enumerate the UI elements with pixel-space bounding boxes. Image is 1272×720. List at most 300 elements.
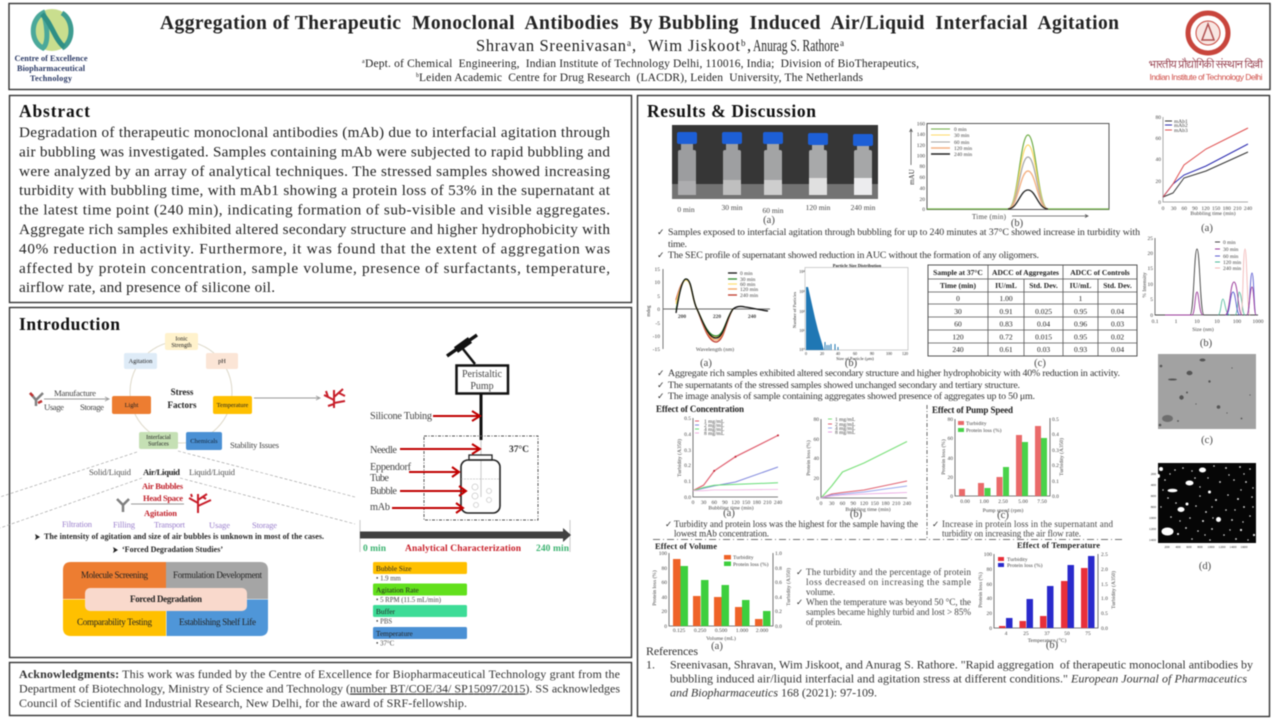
chart: SEC profile: 160 [917, 122, 925, 128]
logo: IIT Delhi: Indian Institute of Technology Delhi [1150, 72, 1263, 82]
vial time labels: 0 min [677, 205, 695, 214]
chart: pump speed bars: 0.4 [1052, 432, 1059, 438]
experimental parameters list: • 1.9 mm [376, 576, 402, 582]
chart: turbidity vs bubbling time: 210 [763, 500, 772, 506]
text: pump speed finding: Increase in protein loss in the supernatant and [942, 519, 1114, 529]
micrograph: aggregates [1158, 354, 1256, 446]
chart: mAb1-3 turbidity over time: mAb3 [1174, 128, 1188, 134]
diagram: stress factors: Light [125, 402, 139, 409]
text: aggregate findings: The image analysis of sample containing aggregates showed presence of aggregates up to 50 μm. [668, 391, 1035, 402]
chart: protein loss vs bubbling time: 90 [850, 501, 856, 507]
process steps: Transport [154, 520, 186, 530]
chart: volume bars: 1.0 [775, 551, 782, 557]
chart: protein loss vs bubbling time: 20 [814, 476, 819, 482]
chart: volume bars: (a) [711, 641, 723, 652]
chart: temperature bars: Turbidity [1007, 557, 1028, 563]
chart: SEC profile: 240 min [954, 152, 972, 158]
table: ADCC: 0.04 [1037, 320, 1050, 328]
chart: temperature bars: (b) [1046, 640, 1059, 651]
arrow: temperature to aggregate [254, 396, 320, 400]
references: References [646, 644, 698, 658]
chart: pump speed bars: 20 [948, 475, 953, 481]
chart: temperature bars: Turbidity (A350) [1110, 571, 1117, 609]
chart: pump speed bars: 1.00 [979, 499, 989, 505]
chart: mAb1-3 turbidity over time: (a) [1201, 223, 1213, 234]
chart: dynamic light scattering: 0 min [1223, 240, 1236, 246]
chart: pump speed bars: 40 [948, 456, 953, 462]
abstract text [19, 124, 611, 296]
chart: circular dichroism: 30 min [740, 277, 756, 283]
table: ADCC: 1.00 [999, 294, 1013, 303]
forced degradation grid: Establishing Shelf Life [179, 617, 256, 627]
table: ADCC: IU/mL [995, 281, 1017, 290]
chart: mAb1-3 turbidity over time: 0 [1162, 206, 1165, 212]
title: Aggregation of Therapeutic Monoclonal Antibodies By Bubbling Induced Air/Liquid Interfacial Agitation [160, 13, 1119, 34]
chart: SEC profile: 80 [920, 164, 925, 170]
chart: dynamic light scattering: 10 [1194, 319, 1200, 325]
authors: a [840, 38, 844, 48]
authors: , [747, 36, 751, 55]
chart: protein loss vs bubbling time: 4 mg/mL [835, 426, 856, 432]
chart: circular dichroism: 0 [657, 307, 660, 313]
arrow: manufacture to light [44, 388, 109, 412]
agitation schematic [117, 481, 211, 518]
chart: volume bars: 0.4 [775, 595, 782, 601]
chart: protein loss vs bubbling time: 0 [820, 501, 823, 507]
chart: particle size distribution: 80 [870, 351, 874, 356]
diagram: stress factors: pH [218, 358, 226, 365]
chart: volume bars: Volume (mL) [706, 635, 736, 642]
text: concentration finding [665, 519, 918, 538]
panel: acknowledgments: Department of Biotechnology, Ministry of Science and Technology (number BT/COE/34/ SP15097/2015). SS acknowledges [19, 682, 620, 696]
chart: circular dichroism: 60 min [740, 282, 756, 288]
text: SEC findings: ✓ [657, 251, 665, 261]
forced degradation grid [63, 562, 268, 636]
vial time labels: 120 min [806, 203, 831, 212]
text: SEC findings: ✓ [657, 228, 665, 238]
intro bullets: ‘Forced Degradation Studies’ [122, 545, 223, 554]
table: ADCC: 120 [952, 332, 964, 342]
chart: protein loss vs bubbling time: 1 mg/mL [835, 417, 856, 423]
chart: mAb1-3 turbidity over time: 210 [1233, 206, 1242, 212]
chart: protein loss vs bubbling time: 210 [892, 501, 901, 507]
panel: acknowledgments [10, 662, 632, 716]
abstract text: affected by protein concentration, sample volume, presence of surfactants, temperature, [19, 260, 610, 277]
heading: effect of pump speed: Effect of Pump Speed [932, 405, 1013, 415]
process steps: Filtration [62, 519, 93, 529]
chart: turbidity vs bubbling time: 0.0 [684, 495, 691, 501]
chart: turbidity vs bubbling time: 0.3 [684, 448, 691, 454]
chart: turbidity vs bubbling time: 0.1 [684, 479, 691, 485]
chart: volume bars: Turbidity (A350) [785, 568, 792, 606]
table: ADCC: ADCC of Controls [1070, 268, 1130, 277]
diagram: stress factors: Factors [168, 400, 197, 410]
chart: dynamic light scattering: 10 [1214, 319, 1220, 325]
chart: volume bars: 0.250 [694, 628, 706, 634]
chart: dynamic light scattering: 240 min [1223, 266, 1241, 272]
chart: mAb1-3 turbidity over time: Bubbling time (min) [1190, 210, 1236, 217]
chart: mAb1-3 turbidity over time: 30 [1171, 206, 1177, 212]
intro bullets [35, 532, 324, 554]
binary image: aggregates: 400 [1175, 545, 1181, 549]
table: ADCC: Time (min) [940, 281, 976, 290]
photo: vials over time [672, 125, 878, 199]
chart: pump speed bars: 0.1 [1052, 479, 1059, 485]
experimental parameters list [373, 562, 467, 648]
text: aggregate findings: ✓ [657, 381, 665, 391]
diagram: peristaltic pump setup: Eppendorf [370, 462, 412, 473]
arrow: timeline [360, 520, 571, 554]
diagram: stress factors: Ionic [175, 336, 188, 342]
chart: volume bars: 40 [662, 595, 667, 601]
experimental parameters list: Bubble Size [376, 564, 411, 573]
table: ADCC: ADCC of Aggregates [992, 268, 1059, 277]
binary image: aggregates: 1000 [1208, 545, 1215, 549]
chart: SEC profile: 60 min [954, 140, 970, 146]
chart: protein loss vs bubbling time: 8 mg/mL [835, 430, 856, 436]
chart: pump speed bars: 2.50 [998, 499, 1008, 505]
table: ADCC: 0.025 [1035, 307, 1052, 316]
chart: mAb1-3 turbidity over time [1156, 115, 1252, 234]
chart: pump speed bars: 0.00 [960, 499, 970, 505]
chart: circular dichroism: 200 [678, 314, 686, 320]
affiliations: b [416, 73, 419, 79]
table: ADCC: 0.015 [1035, 332, 1052, 342]
vial time labels: 60 min [762, 206, 784, 215]
abstract text: the latest time point (240 min), indicating formation of sub-visible and visible aggregates. [19, 202, 610, 219]
diagram: peristaltic pump setup: Needle [370, 445, 397, 456]
chart: dynamic light scattering: 5 [1150, 297, 1153, 303]
panel: acknowledgments: Acknowledgments: This work was funded by the Centre of Excellence for Biopharmaceutical Technology grant from the [19, 667, 620, 681]
binary image: aggregates: 1600 [1240, 545, 1248, 549]
binary image: aggregates: 1400 [1230, 545, 1237, 549]
chart: pump speed bars: 5.00 [1018, 499, 1028, 505]
chart: circular dichroism: -5 [655, 321, 660, 327]
chart: protein loss vs bubbling time: 80 [814, 417, 819, 423]
chart: turbidity vs bubbling time: 90 [722, 500, 728, 506]
forced degradation grid: Formulation Development [173, 570, 262, 580]
chart: pump speed bars: (c) [997, 510, 1009, 521]
chart: SEC profile: 0 min [954, 127, 967, 133]
text: volume and temperature findings: loss decreased on increasing the sample [806, 577, 971, 587]
chart: particle size distribution: 10⁴ [799, 269, 805, 274]
chart: dynamic light scattering: 10 [1148, 282, 1153, 288]
heading: effect of concentration: Effect of Concentration [656, 404, 744, 414]
process steps: Usage [209, 520, 230, 530]
chart: temperature bars: 40 [986, 596, 992, 602]
chart: temperature bars: 1.5 [1101, 582, 1108, 588]
binary image: aggregates: 800 [1151, 505, 1156, 509]
affiliations: Leiden Academic Centre for Drug Research (LACDR), Leiden University, The Netherlands [419, 72, 864, 84]
chart: SEC profile: 140 [917, 132, 925, 138]
chart: SEC profile: 120 [917, 143, 925, 149]
text: volume and temperature findings [796, 567, 971, 627]
experimental parameters list: • 37°C [376, 640, 395, 648]
binary image: aggregates: 200 [1151, 472, 1156, 476]
panel: abstract [10, 96, 632, 302]
chart: mAb1-3 turbidity over time: 180 [1223, 206, 1231, 212]
chart: SEC profile: 100 [917, 154, 925, 160]
logo: IIT Delhi: भारतीय प्रौद्योगिकी संस्थान दिल्ली [1149, 57, 1264, 71]
chart: temperature bars: Protein loss (%) [1007, 562, 1043, 569]
affiliations: a [362, 59, 365, 65]
experimental parameters list: • 5 RPM (11.5 mL/min) [376, 597, 441, 604]
table: ADCC: IU/mL [1070, 281, 1091, 290]
chart: particle size distribution: Number of Particles [792, 292, 797, 328]
diagram: stress factors: Agitation [129, 358, 153, 365]
references: bubbling induced air/liquid interfacial and agitation stress at different conditions." European Journal of Pharmaceutics [670, 672, 1247, 686]
arrow: timeline: 240 min [536, 544, 570, 554]
chart: temperature bars [977, 552, 1117, 651]
chart: turbidity vs bubbling time: Bubbling time (min) [708, 504, 754, 512]
chart: SEC profile: 0 [922, 207, 925, 213]
diagram: peristaltic pump setup: mAb [370, 502, 390, 513]
table: ADCC: 0.03 [1037, 345, 1050, 354]
diagram: peristaltic pump setup: Tube [370, 473, 389, 484]
abstract text: were analyzed by an array of analytical techniques. The stressed samples showed increasing [19, 163, 610, 180]
authors: Wim Jiskoot [648, 36, 740, 55]
chart: volume bars: 100 [659, 551, 667, 557]
chart: circular dichroism: 0 min [740, 271, 753, 277]
chart: pump speed bars: 0.3 [1052, 448, 1059, 454]
table: ADCC: 0.04 [1111, 307, 1124, 316]
chart: circular dichroism: Wavelength (nm) [696, 346, 734, 353]
text: concentration finding: Turbidity and protein loss was the highest for the sample having the [674, 519, 918, 529]
text: concentration finding: lowest mAb concentration. [674, 528, 769, 538]
chart: dynamic light scattering: 120 min [1223, 260, 1241, 266]
agitation schematic: Agitation [144, 508, 177, 518]
chart: turbidity vs bubbling time: 0.4 [684, 432, 691, 438]
diagram: stress factors: Interfacial [146, 434, 171, 441]
chart: circular dichroism [647, 267, 770, 369]
affiliations: Dept. of Chemical Engineering, Indian Institute of Technology Delhi, 110016, India; Division of BioTherapeutics, [365, 58, 919, 70]
references [646, 644, 1253, 700]
text: volume and temperature findings: When the temperature was beyond 50 °C, the [806, 597, 971, 607]
chart: dynamic light scattering: 30 min [1223, 247, 1239, 253]
logo: IIT Delhi [1149, 13, 1264, 82]
vial time labels: 30 min [721, 203, 743, 212]
agitation schematic: Air Bubbles [142, 481, 184, 491]
chart: pump speed bars: Turbidity (A350) [1058, 438, 1065, 476]
panel: acknowledgments: Council of Scientific and Industrial Research, New Delhi, for the award of SRF-fellowship. [19, 696, 467, 710]
chart: dynamic light scattering: 0.1 [1152, 319, 1159, 325]
chart: temperature bars: 0 [989, 626, 992, 632]
chart: volume bars: 0.6 [775, 580, 782, 586]
chart: circular dichroism: 240 min [740, 293, 758, 299]
chart: dynamic light scattering: Size (nm) [1192, 326, 1214, 333]
chart: particle size distribution: 10⁰ [799, 347, 805, 352]
chart: turbidity vs bubbling time: 2 mg/mL [704, 423, 725, 429]
diagram: peristaltic pump setup: Peristaltic [462, 369, 503, 380]
affiliations [362, 58, 919, 84]
text: volume and temperature findings: of protein. [806, 617, 842, 627]
chart: protein loss vs bubbling time: 60 [814, 437, 819, 443]
table: ADCC: 0.03 [1111, 320, 1124, 328]
abstract text: Aggregate rich samples exhibited altered secondary structure and higher hydrophobicity with [19, 221, 610, 238]
chart: dynamic light scattering: 100 [1233, 319, 1241, 325]
chart: temperature bars: 80 [986, 567, 992, 573]
chart: temperature bars: 60 [986, 582, 992, 588]
panel: header [9, 4, 1270, 90]
chart: temperature bars: 1.0 [1101, 596, 1108, 602]
forced degradation grid: Comparability Testing [77, 617, 152, 627]
chart: temperature bars: 20 [986, 611, 992, 617]
chart: SEC profile: Time (min) [972, 213, 1007, 221]
interface labels: Liquid/Liquid [189, 467, 236, 477]
chart: mAb1-3 turbidity over time: 60 [1156, 136, 1161, 142]
binary image: aggregates: 600 [1186, 545, 1192, 549]
chart: protein loss vs bubbling time: 0 [816, 496, 819, 502]
chart: volume bars: Turbidity [733, 555, 754, 561]
chart: pump speed bars: 0.0 [1052, 494, 1059, 500]
authors: Shravan Sreenivasan [476, 36, 626, 55]
chart: circular dichroism: (a) [700, 358, 712, 369]
chart: particle size distribution: 20 [820, 351, 824, 356]
chart: protein loss vs bubbling time: Bubbling time (min) [845, 506, 891, 513]
chart: dynamic light scattering [1142, 236, 1264, 349]
chart: temperature bars: 2.5 [1101, 552, 1108, 558]
chart: temperature bars: 25 [1023, 631, 1029, 637]
experimental parameters list: Temperature [376, 629, 413, 638]
vial time labels [677, 203, 876, 226]
chart: particle size distribution: 100 [886, 351, 892, 356]
text: pump speed finding: turbidity on increasing the air flow rate. [942, 528, 1081, 538]
chart: mAb1-3 turbidity over time: mAb2 [1174, 123, 1188, 129]
binary image: aggregates: 800 [1197, 545, 1203, 549]
chart: turbidity vs bubbling time: 0.5 [684, 416, 691, 422]
text: volume and temperature findings: The turbidity and the percentage of protein [806, 567, 971, 577]
abstract text: Degradation of therapeutic monoclonal antibodies (mAb) due to interfacial agitation through [19, 124, 610, 141]
chart: mAb1-3 turbidity over time: 120 [1201, 206, 1210, 212]
chart: mAb1-3 turbidity over time: 90 [1192, 206, 1198, 212]
chart: volume bars: 0.8 [775, 566, 782, 572]
binary image: aggregates [1149, 463, 1256, 572]
table: ADCC: Std. Dev. [1103, 281, 1132, 290]
text: SEC findings: Samples exposed to interfacial agitation through bubbling for up to 240 minutes at 37°C showed increase in turbidity with [668, 227, 1140, 238]
table: ADCC: 0.02 [1111, 332, 1124, 342]
chart: volume bars: 0.0 [775, 624, 782, 630]
arrow: manufacture to light: Manufacture [54, 388, 96, 398]
chart: pump speed bars: 0 [950, 494, 953, 500]
logo: Centre of Excellence: Technology [30, 74, 73, 83]
chart: protein loss vs bubbling time: 240 [903, 501, 911, 507]
chart: turbidity vs bubbling time: 8 mg/mL [704, 431, 725, 437]
chart: mAb1-3 turbidity over time: 240 [1244, 206, 1252, 212]
chart: dynamic light scattering: 20 [1148, 251, 1153, 257]
stability issues label: Stability Issues [230, 440, 280, 450]
chart: protein loss vs bubbling time [805, 417, 911, 520]
chart: circular dichroism: 15 [654, 267, 660, 273]
chart: particle size distribution [792, 263, 908, 369]
chart: SEC profile [908, 122, 1109, 229]
chart: dynamic light scattering: (b) [1200, 338, 1213, 349]
experimental parameters list: Buffer [376, 607, 395, 616]
table: ADCC: 0.96 [1074, 320, 1087, 328]
icon: antibody [30, 393, 43, 406]
chart: volume bars: 2.000 [756, 628, 768, 634]
chart: mAb1-3 turbidity over time: 150 [1212, 206, 1220, 212]
chart: protein loss vs bubbling time: 120 [860, 501, 868, 507]
chart: dynamic light scattering: 1000 [1252, 319, 1264, 325]
experimental parameters list: • PBS [376, 618, 392, 626]
chart: circular dichroism: 240 [748, 314, 756, 320]
chart: particle size distribution: 10³ [799, 289, 805, 294]
abstract text: turbidity with bubbling time, with mAb1 showing a protein loss of 53% in the supernatant at [19, 182, 611, 199]
chart: turbidity vs bubbling time: 0.2 [684, 463, 691, 469]
table: ADCC: Sample at 37°C [933, 268, 983, 277]
table: ADCC: 30 [954, 307, 962, 316]
chart: turbidity vs bubbling time: 0 [692, 500, 695, 506]
text: aggregate findings: ✓ [657, 369, 665, 379]
abstract text: airflow rate, and presence of silicone oil. [19, 279, 275, 296]
chart: mAb1-3 turbidity over time: mAb1 [1174, 119, 1188, 125]
panel: results and discussion [638, 96, 1270, 716]
table: ADCC: 240 [952, 345, 964, 354]
chart: turbidity vs bubbling time: 240 [774, 500, 782, 506]
text: aggregate findings: The supernatants of the stressed samples showed unchanged secondary and tertiary structure. [668, 380, 1020, 391]
chart: volume bars: 60 [662, 580, 667, 586]
chart: circular dichroism: 10 [654, 280, 660, 286]
authors: b [741, 38, 746, 48]
chart: temperature bars: Temperature (°C) [1028, 637, 1066, 644]
text: pump speed finding: ✓ [932, 520, 939, 530]
diagram: stress factors: Strength [171, 343, 192, 349]
chart: particle size distribution: 40 [836, 351, 840, 356]
chart: pump speed bars: 60 [948, 436, 953, 442]
chart: turbidity vs bubbling time: 30 [701, 500, 707, 506]
chart: circular dichroism: 120 min [740, 287, 758, 293]
chart: pump speed bars: Protein loss (%) [966, 427, 1002, 434]
table: ADCC [928, 265, 1137, 369]
chart: volume bars: 1.000 [736, 628, 748, 634]
text: volume and temperature findings: ✓ [796, 598, 803, 608]
chart: temperature bars: Protein loss (%) [977, 572, 984, 608]
panel: introduction [0, 308, 632, 658]
authors: Anurag S. Rathore [753, 36, 839, 55]
chart: protein loss vs bubbling time: 40 [814, 456, 819, 462]
chart: pump speed bars: 7.50 [1037, 499, 1047, 505]
chart: temperature bars: 100 [984, 552, 992, 558]
chart: turbidity vs bubbling time: 150 [742, 500, 750, 506]
chart: turbidity vs bubbling time [676, 416, 782, 519]
chart: particle size distribution: 0 [805, 351, 807, 356]
chart: temperature bars: 4 [1005, 631, 1008, 637]
text: aggregate findings: ✓ [657, 392, 665, 402]
vial time labels: (a) [763, 215, 775, 226]
chart: circular dichroism: -10 [653, 334, 660, 340]
table: ADCC: 0.95 [1074, 332, 1087, 342]
arrow: timeline: Analytical Characterization [405, 544, 522, 554]
interface labels: Air/Liquid [143, 467, 180, 477]
logo: Centre of Excellence [14, 9, 88, 83]
chart: particle size distribution: Size of Particle (μm) [836, 356, 874, 361]
agitation schematic: Head Space [143, 493, 183, 503]
chart: particle size distribution: 120 [902, 351, 908, 356]
binary image: aggregates: 400 [1151, 483, 1156, 487]
binary image: aggregates: 1200 [1218, 545, 1226, 549]
chart: turbidity vs bubbling time: 1 mg/mL [704, 419, 725, 425]
chart: dynamic light scattering: 25 [1148, 236, 1153, 242]
chart: circular dichroism: 220 [713, 314, 721, 320]
introduction heading: Introduction [19, 314, 120, 334]
heading: effect of volume: Effect of Volume [655, 541, 717, 551]
chart: SEC profile: 40 [920, 186, 925, 192]
text: volume and temperature findings: samples became highly turbid and lost > 85% [806, 607, 971, 617]
table: ADCC: Std. Dev. [1029, 281, 1058, 290]
chart: SEC profile: 60 [920, 175, 925, 181]
chart: temperature bars: 75 [1085, 631, 1091, 637]
chart: particle size distribution: 10² [799, 309, 805, 314]
